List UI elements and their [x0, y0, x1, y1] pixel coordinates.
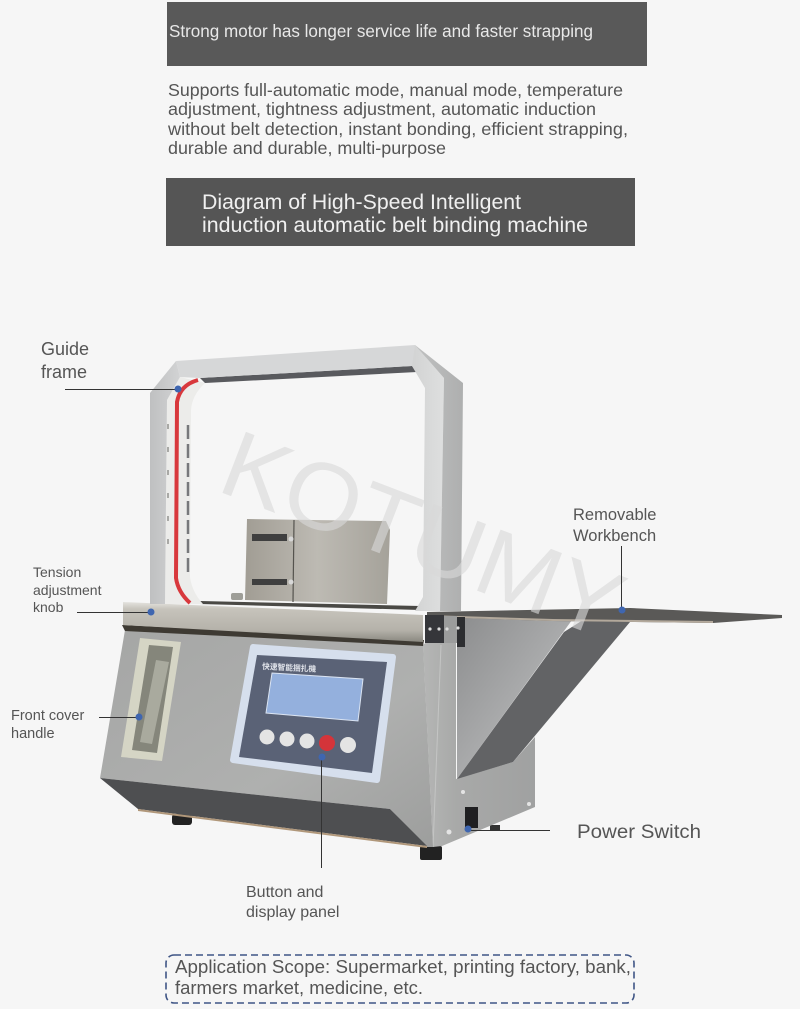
inner channel: [165, 377, 205, 604]
callout: guide frame: Guide: [41, 339, 89, 359]
application scope box: [166, 955, 634, 1003]
callout: guide frame: frame: [41, 362, 87, 382]
text block: features: [167, 80, 628, 158]
callout: removable workbench: Removable: [573, 506, 656, 524]
callout: button and display panel: Button and: [246, 884, 323, 901]
text block: features: adjustment, tightness adjustment, automatic induction: [168, 99, 596, 119]
top band: [176, 345, 428, 378]
banner: motor heading: [167, 2, 647, 66]
workbench plate: [427, 608, 782, 623]
back plate: [200, 519, 420, 610]
text block: features: durable and durable, multi-purpose: [168, 138, 446, 158]
right leg faces: [412, 345, 444, 611]
guide frame: [150, 345, 463, 611]
callout: front cover handle: handle: [11, 726, 55, 742]
workbench support: [457, 617, 630, 779]
banner: diagram title: Diagram of High-Speed Intelligent: [202, 191, 521, 214]
callout: front cover handle: [11, 708, 142, 742]
text block: features: Supports full-automatic mode, manual mode, temperature: [168, 80, 623, 100]
callout: tension adjustment knob: [33, 564, 154, 616]
banner: diagram title: induction automatic belt binding machine: [202, 214, 588, 237]
front cover handle: [121, 638, 181, 761]
silver top bar: [123, 602, 423, 642]
side column and plate: [423, 630, 535, 847]
banner: motor heading: Strong motor has longer service life and faster strapping: [169, 21, 593, 41]
watermark: KOTUMY: [207, 411, 638, 660]
callout: guide frame: [41, 339, 182, 392]
red strap: [176, 380, 198, 603]
dark rail top: [200, 366, 417, 383]
text block: features: without belt detection, instant bonding, efficient strapping,: [167, 119, 628, 139]
callout: button and display panel: display panel: [246, 904, 339, 921]
callout: tension adjustment knob: Tension: [33, 564, 81, 580]
callout: tension adjustment knob: knob: [33, 599, 64, 615]
application scope box: farmers market, medicine, etc.: [175, 977, 423, 998]
callout: power switch: Power Switch: [577, 821, 701, 843]
left leg: [150, 361, 180, 604]
application scope box: Application Scope: Supermarket, printing factory, bank,: [175, 956, 631, 977]
callout: power switch: [464, 821, 701, 843]
callout: front cover handle: Front cover: [11, 708, 84, 724]
machine illustration: [100, 345, 782, 860]
banner: diagram title: [166, 178, 635, 246]
control panel: [233, 647, 393, 780]
power switch: [465, 807, 478, 828]
callout: removable workbench: [573, 506, 656, 614]
base body: [100, 625, 433, 848]
corner bracket: [425, 615, 465, 647]
callout: tension adjustment knob: adjustment: [33, 582, 102, 598]
control panel: 快速智能捆扎機: [262, 661, 316, 674]
feet: [172, 814, 192, 825]
callout: button and display panel: [246, 754, 339, 921]
callout: removable workbench: Workbench: [573, 527, 656, 545]
rail: [187, 425, 189, 575]
